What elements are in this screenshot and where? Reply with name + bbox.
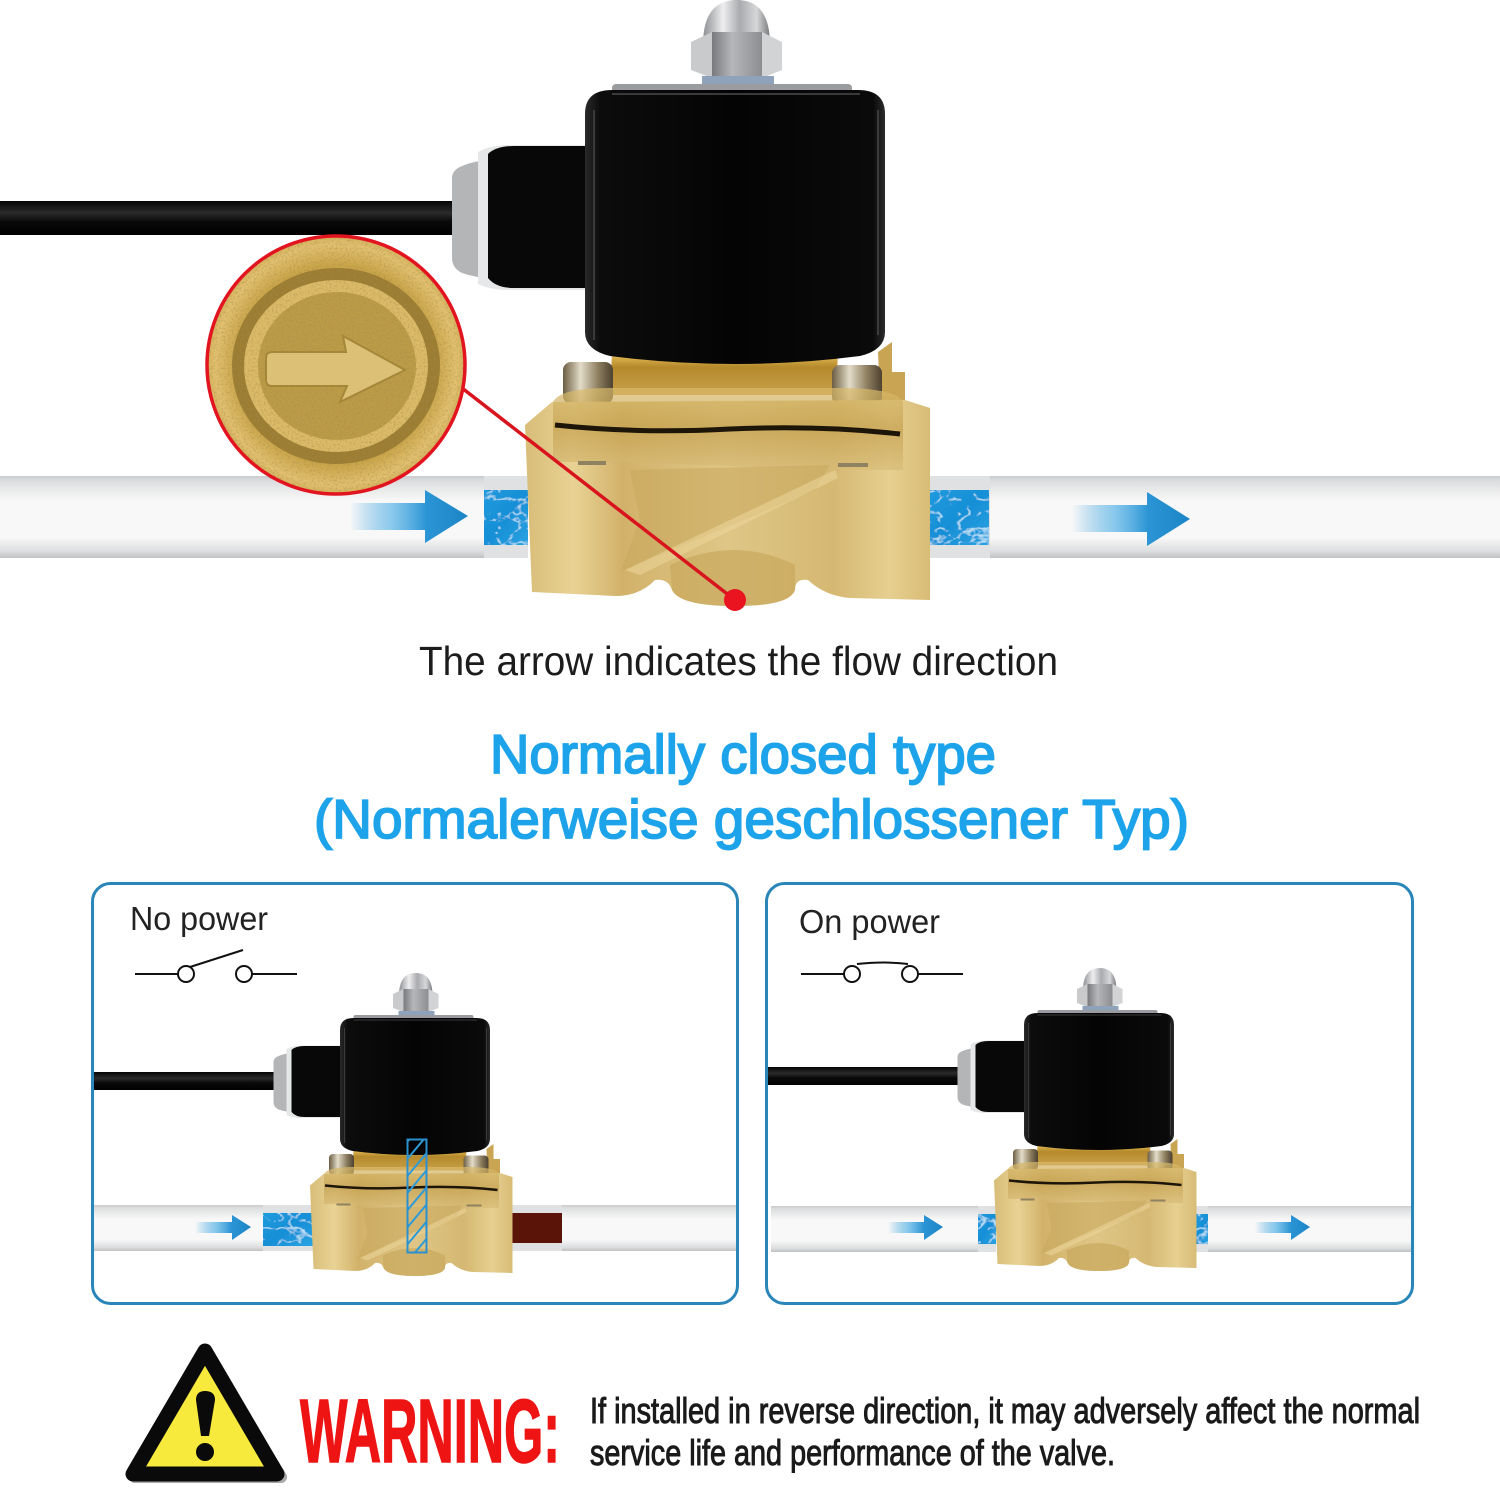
switch symbol: open [135, 950, 297, 982]
magnified flow arrow detail [207, 236, 465, 494]
warning message: service life and performance of the valve. [590, 1432, 1115, 1473]
arrow: inlet flow [350, 490, 468, 543]
warning triangle icon [133, 1351, 281, 1477]
magnifier callout line [462, 388, 735, 600]
embossed arrow [266, 336, 405, 402]
heading: normally closed type: (Normalerweise geschlossener Typ) [314, 788, 1189, 850]
brass body [525, 388, 930, 606]
warning label: WARNING: [300, 1382, 560, 1482]
valve: open [958, 968, 1196, 1271]
hatched closed plunger [408, 1140, 426, 1252]
cable [768, 1067, 960, 1085]
panel: no power [92, 884, 738, 1304]
magnifier end dot [724, 589, 746, 611]
valve dome and bolts [563, 342, 905, 405]
valve cap nut [612, 0, 852, 93]
arrow: flow in [888, 1215, 943, 1240]
black coil [585, 90, 885, 364]
pipe with open flow [771, 1206, 1411, 1252]
heading: normally closed type: Normally closed type [490, 723, 996, 785]
solenoid valve [452, 0, 930, 606]
valve: closed [274, 973, 512, 1276]
cable [94, 1072, 276, 1090]
arrow: flow out [1255, 1215, 1310, 1240]
main pipe with water flow [0, 476, 1500, 558]
label: on power: On power [799, 903, 940, 940]
heading: normally closed type [314, 723, 1189, 850]
connector housing [452, 145, 592, 290]
arrow: outlet flow [1072, 492, 1190, 546]
pipe with blocked flow [94, 1205, 736, 1251]
label: no power: No power [130, 900, 268, 937]
switch symbol: closed [801, 962, 963, 982]
panel: on power [766, 884, 1412, 1304]
power cable [0, 201, 454, 235]
warning message [590, 1390, 1420, 1473]
arrow: flow in [195, 1215, 251, 1240]
coil highlights [594, 94, 878, 340]
caption: flow direction: The arrow indicates the flow direction [419, 638, 1058, 684]
